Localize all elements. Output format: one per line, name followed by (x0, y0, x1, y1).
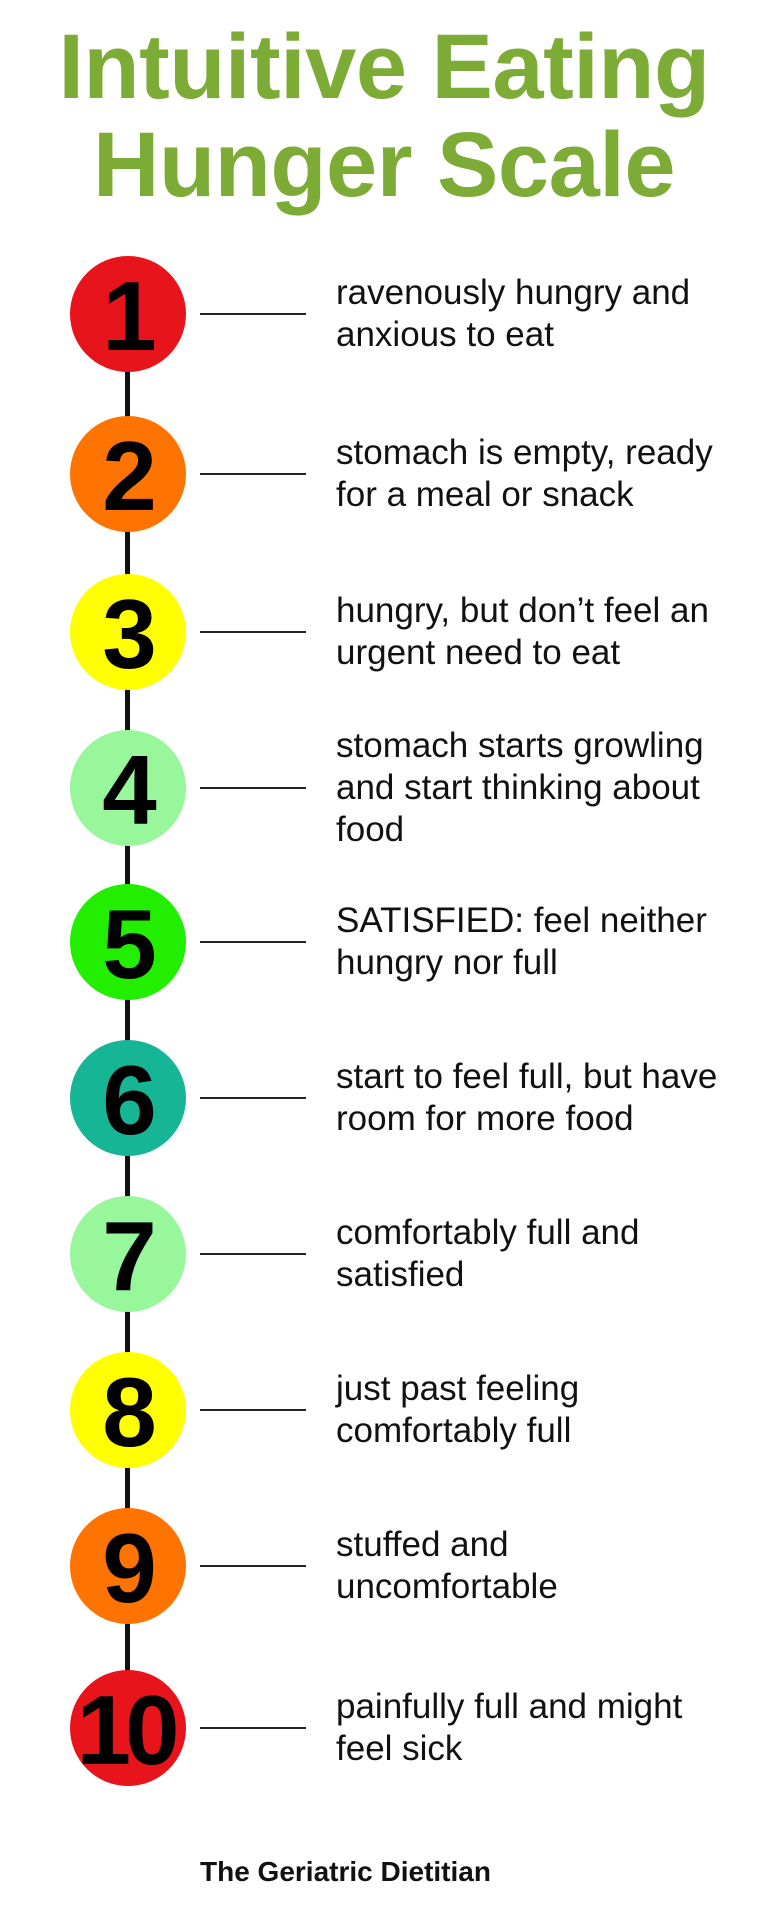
item 2: stomach is empty, ready for a meal or snack (336, 433, 713, 514)
title (58, 16, 710, 216)
item 7: 7 (102, 1201, 154, 1311)
item 3: hungry, but don’t feel an urgent need to eat (336, 591, 709, 672)
item 5: 5 (102, 889, 154, 999)
item 1 (70, 256, 690, 372)
item 8: just past feeling comfortably full (336, 1369, 579, 1450)
title: Hunger Scale (93, 114, 675, 216)
item 10 (70, 1670, 682, 1786)
item 4: 4 (102, 735, 154, 845)
title: Intuitive Eating (58, 16, 710, 118)
footer credit: The Geriatric Dietitian (200, 1856, 491, 1887)
item 8 (70, 1352, 579, 1468)
item 5: SATISFIED: feel neither hungry nor full (336, 901, 707, 982)
item 5 (70, 884, 707, 1000)
item 6: 6 (102, 1045, 154, 1155)
item 2: 2 (102, 421, 154, 531)
item 2 (70, 416, 713, 532)
item 9: stuffed and uncomfortable (336, 1525, 558, 1606)
item 10: painfully full and might feel sick (336, 1687, 682, 1768)
item 9: 9 (102, 1513, 154, 1623)
item 4: stomach starts growling and start thinking about food (336, 726, 704, 849)
item 3 (70, 574, 709, 690)
item 6 (70, 1040, 717, 1156)
item 9 (70, 1508, 558, 1624)
item 3: 3 (102, 579, 154, 689)
item 1: ravenously hungry and anxious to eat (336, 273, 690, 354)
item 10: 10 (76, 1675, 174, 1785)
scale connector line (125, 314, 130, 1728)
item 8: 8 (102, 1357, 154, 1467)
item 7: comfortably full and satisfied (336, 1213, 639, 1294)
item 4 (70, 726, 704, 849)
item 6: start to feel full, but have room for more food (336, 1057, 717, 1138)
item 7 (70, 1196, 639, 1312)
item 1: 1 (102, 261, 154, 371)
